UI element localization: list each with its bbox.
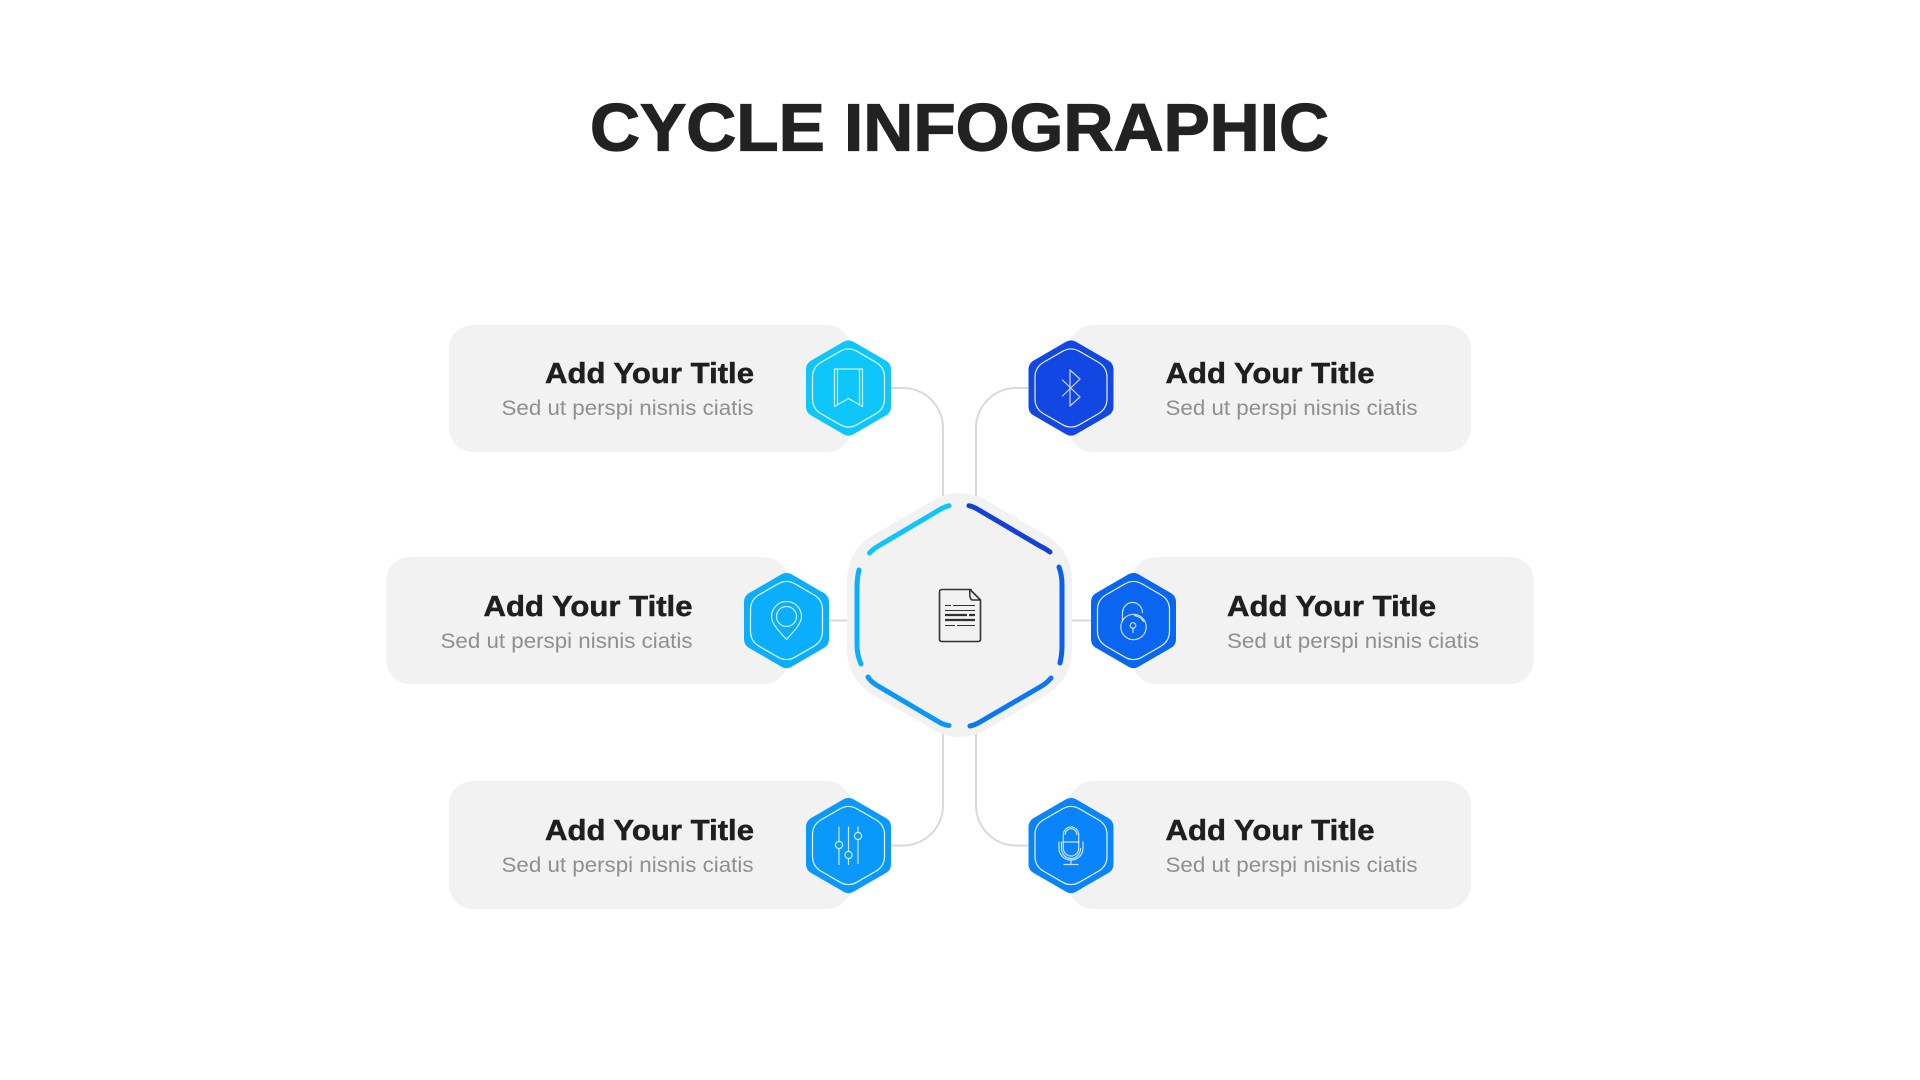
panel: top right card: [1069, 325, 1471, 452]
text: bottom right: Sed ut perspi nisnis ciatis: [1166, 853, 1418, 877]
text: middle left: Sed ut perspi nisnis ciatis: [440, 629, 692, 653]
icon: bluetooth hexagon: [1035, 349, 1107, 427]
icon: padlock hexagon: [1098, 581, 1170, 660]
connector lines: [829, 388, 1091, 846]
ring segment: bottom left: [868, 677, 949, 726]
text: bottom left: Sed ut perspi nisnis ciatis: [502, 853, 754, 877]
ring segment: top right: [969, 506, 1050, 552]
ring segment: left: [857, 570, 861, 664]
icon: sliders hexagon: [812, 806, 884, 885]
panel: middle right card: [1132, 557, 1534, 684]
panel: middle left card: [386, 557, 788, 684]
panel: top left card: [449, 325, 851, 452]
icon: document: [940, 590, 980, 642]
heading: top left: Add Your Title: [545, 358, 754, 390]
ring segment: top left: [870, 506, 949, 553]
heading: bottom right: Add Your Title: [1166, 815, 1374, 847]
heading: bottom left: Add Your Title: [545, 815, 754, 847]
panel: bottom right card: [1069, 781, 1471, 909]
text: top right: Sed ut perspi nisnis ciatis: [1166, 396, 1418, 420]
icon: microphone hexagon: [1035, 806, 1107, 885]
text: middle right: Sed ut perspi nisnis ciatis: [1227, 629, 1479, 653]
ring segment: bottom right: [970, 678, 1051, 726]
heading: top right: Add Your Title: [1166, 358, 1374, 390]
ring segment: right: [1059, 567, 1062, 663]
central hexagon: [847, 493, 1072, 737]
panel: bottom left card: [449, 781, 851, 909]
heading: middle left: Add Your Title: [484, 591, 692, 623]
text: top left: Sed ut perspi nisnis ciatis: [502, 396, 754, 420]
icon: bookmark hexagon: [812, 349, 884, 427]
icon: location pin hexagon: [750, 581, 822, 660]
heading: middle right: Add Your Title: [1227, 591, 1436, 623]
title: CYCLE INFOGRAPHIC: [590, 92, 1329, 166]
